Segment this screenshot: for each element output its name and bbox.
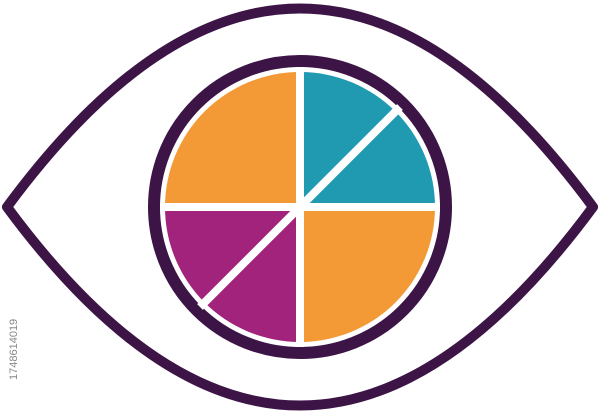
pie chart xyxy=(160,67,440,347)
pie slice: bottom-left magenta xyxy=(165,207,300,342)
pie dividers xyxy=(160,67,440,347)
pie slice: top-right teal xyxy=(300,72,435,207)
watermark id: 1748614019 xyxy=(8,319,20,380)
pie slice: bottom-right orange xyxy=(300,207,435,342)
icon: iris ring xyxy=(154,61,446,353)
pie slice: top-left orange xyxy=(165,72,300,207)
